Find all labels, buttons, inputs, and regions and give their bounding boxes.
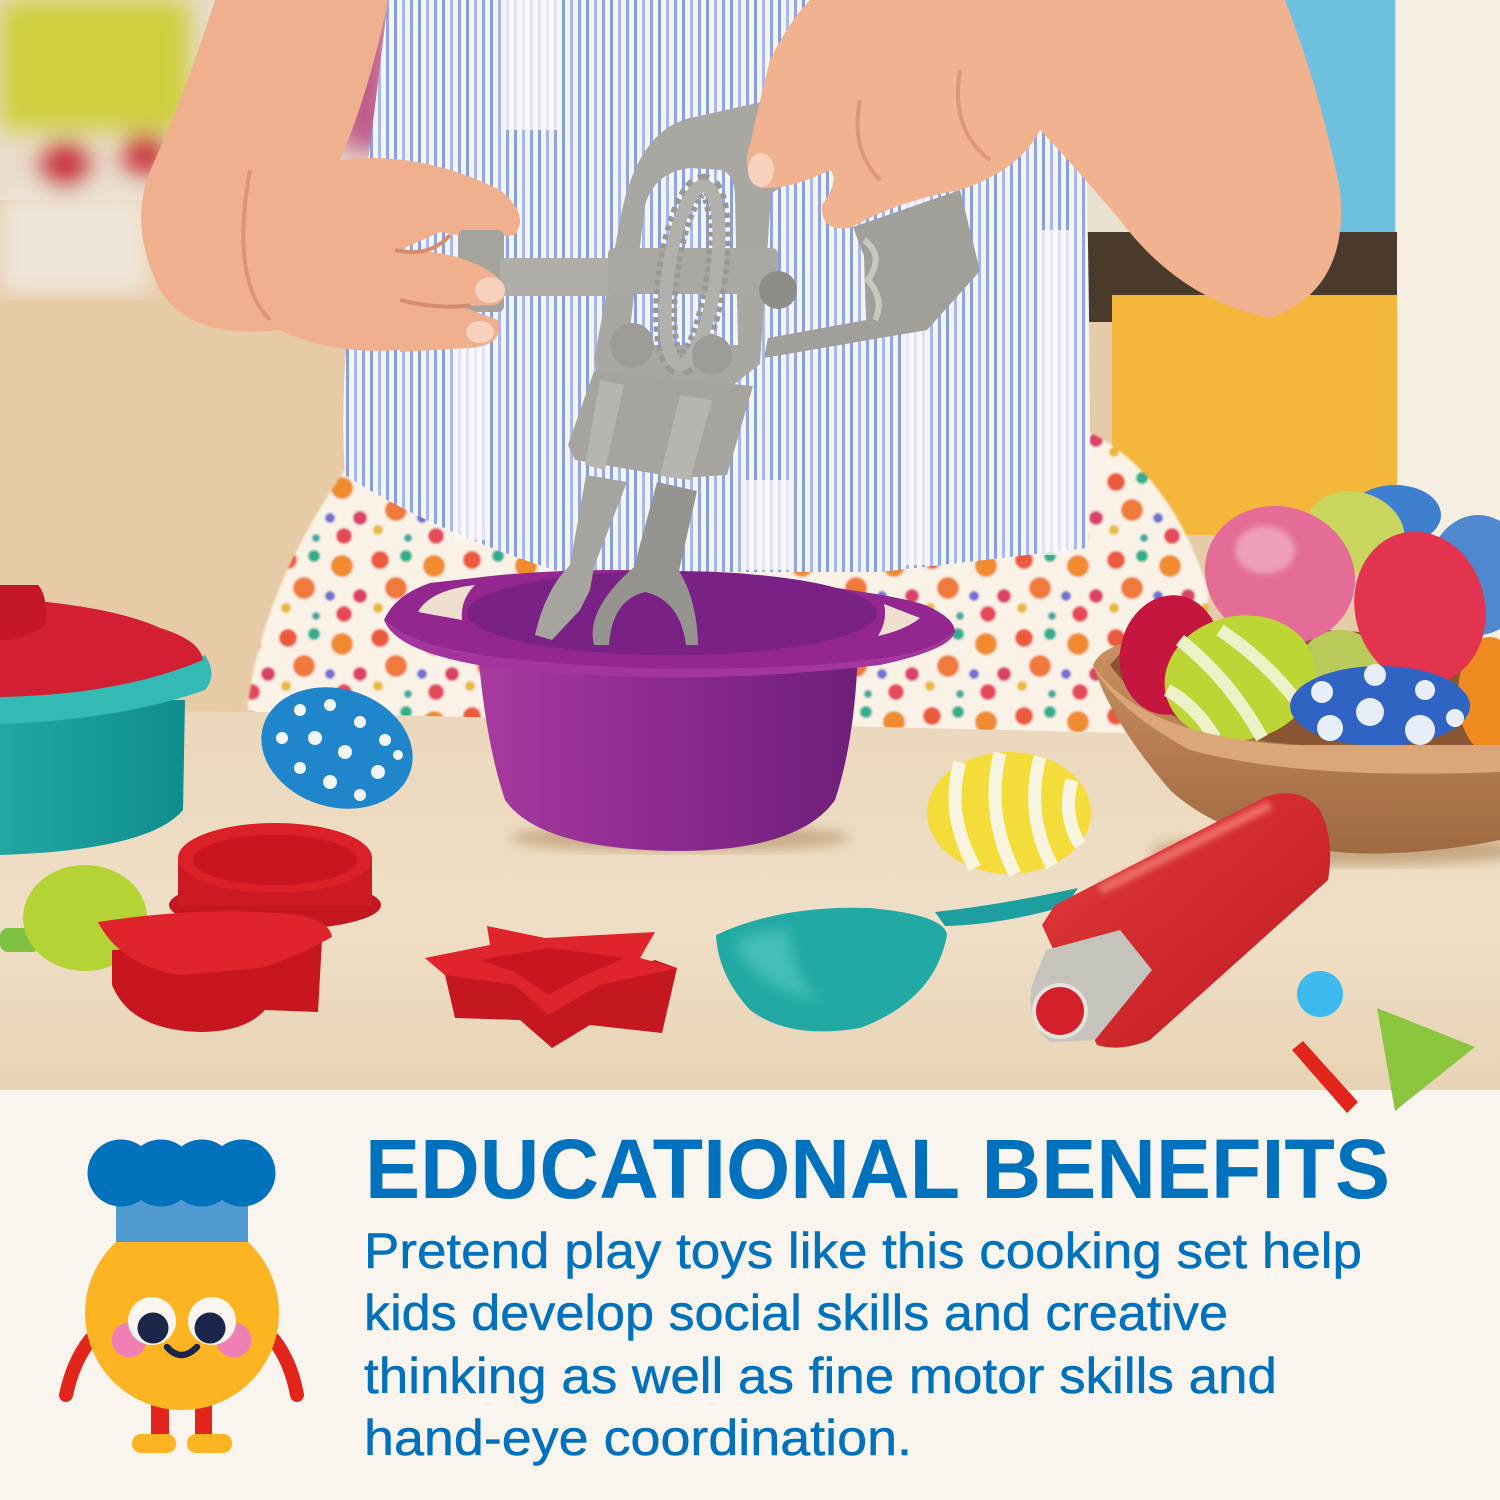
yellow striped egg <box>927 752 1091 874</box>
mixer left beater <box>535 475 627 640</box>
bowl front rim <box>384 620 955 678</box>
mixer crank and axle <box>458 230 797 312</box>
table shadow under bowl <box>1150 834 1500 866</box>
mascot hat top <box>88 1140 276 1206</box>
body text: Pretend play toys like this cooking set help <box>364 1223 1362 1279</box>
body text: hand-eye coordination. <box>364 1410 912 1466</box>
photo: child playing with toy cooking set <box>0 0 1500 1090</box>
bottom text panel <box>0 1090 1500 1500</box>
blurred room background <box>0 0 1500 720</box>
icon: red bar <box>1292 1041 1358 1113</box>
left arm and hand <box>141 0 520 351</box>
red rolling pin <box>1030 793 1330 1048</box>
mixer right beater <box>593 482 698 645</box>
mixer right handle <box>764 190 980 358</box>
mixer gear wheel <box>656 183 728 367</box>
mascot head <box>85 1242 279 1410</box>
icon: blue circle <box>1297 971 1343 1017</box>
heading: EDUCATIONAL BENEFITS <box>365 1122 1390 1216</box>
mascot eyes <box>128 1297 236 1345</box>
wooden table <box>0 710 1500 1090</box>
body text: kids develop social skills and creative <box>364 1285 1228 1341</box>
mascot cheeks <box>112 1322 252 1358</box>
purple mixing bowl <box>384 570 955 852</box>
mixer window showing apron <box>620 160 745 350</box>
polka dot blue egg in bowl <box>1290 664 1470 746</box>
striped green egg <box>1153 602 1327 754</box>
icon: green triangle <box>1377 1008 1475 1111</box>
red round cutter <box>169 823 381 930</box>
red half heart cutter <box>98 911 332 1032</box>
green pastry wheel <box>0 865 147 971</box>
mascot feet <box>132 1434 232 1453</box>
decorative shapes: circle, bar, triangle <box>1292 971 1475 1113</box>
polka dot blue egg <box>246 669 428 827</box>
mixer small gears <box>610 323 732 375</box>
teal pot with red lid <box>0 585 212 855</box>
right arm and hand <box>747 0 1341 318</box>
mixer body <box>568 371 753 478</box>
hand mixer toy <box>458 100 980 645</box>
body text: thinking as well as fine motor skills and <box>364 1348 1277 1404</box>
mascot hat band <box>116 1195 248 1245</box>
mascot: chef character <box>66 1140 297 1453</box>
mascot legs <box>151 1400 212 1436</box>
teal scoop <box>716 888 1078 1031</box>
toy wooden bowl with dyed eggs <box>1093 480 1500 853</box>
mixer frame <box>594 100 790 390</box>
mascot arms <box>66 1340 297 1395</box>
left hand fingers over crank <box>395 235 505 352</box>
mascot smile <box>167 1347 197 1355</box>
striped apron <box>343 0 1090 572</box>
floral skirt <box>248 430 1210 745</box>
red star cutter <box>425 926 677 1048</box>
body text <box>364 1223 1362 1466</box>
